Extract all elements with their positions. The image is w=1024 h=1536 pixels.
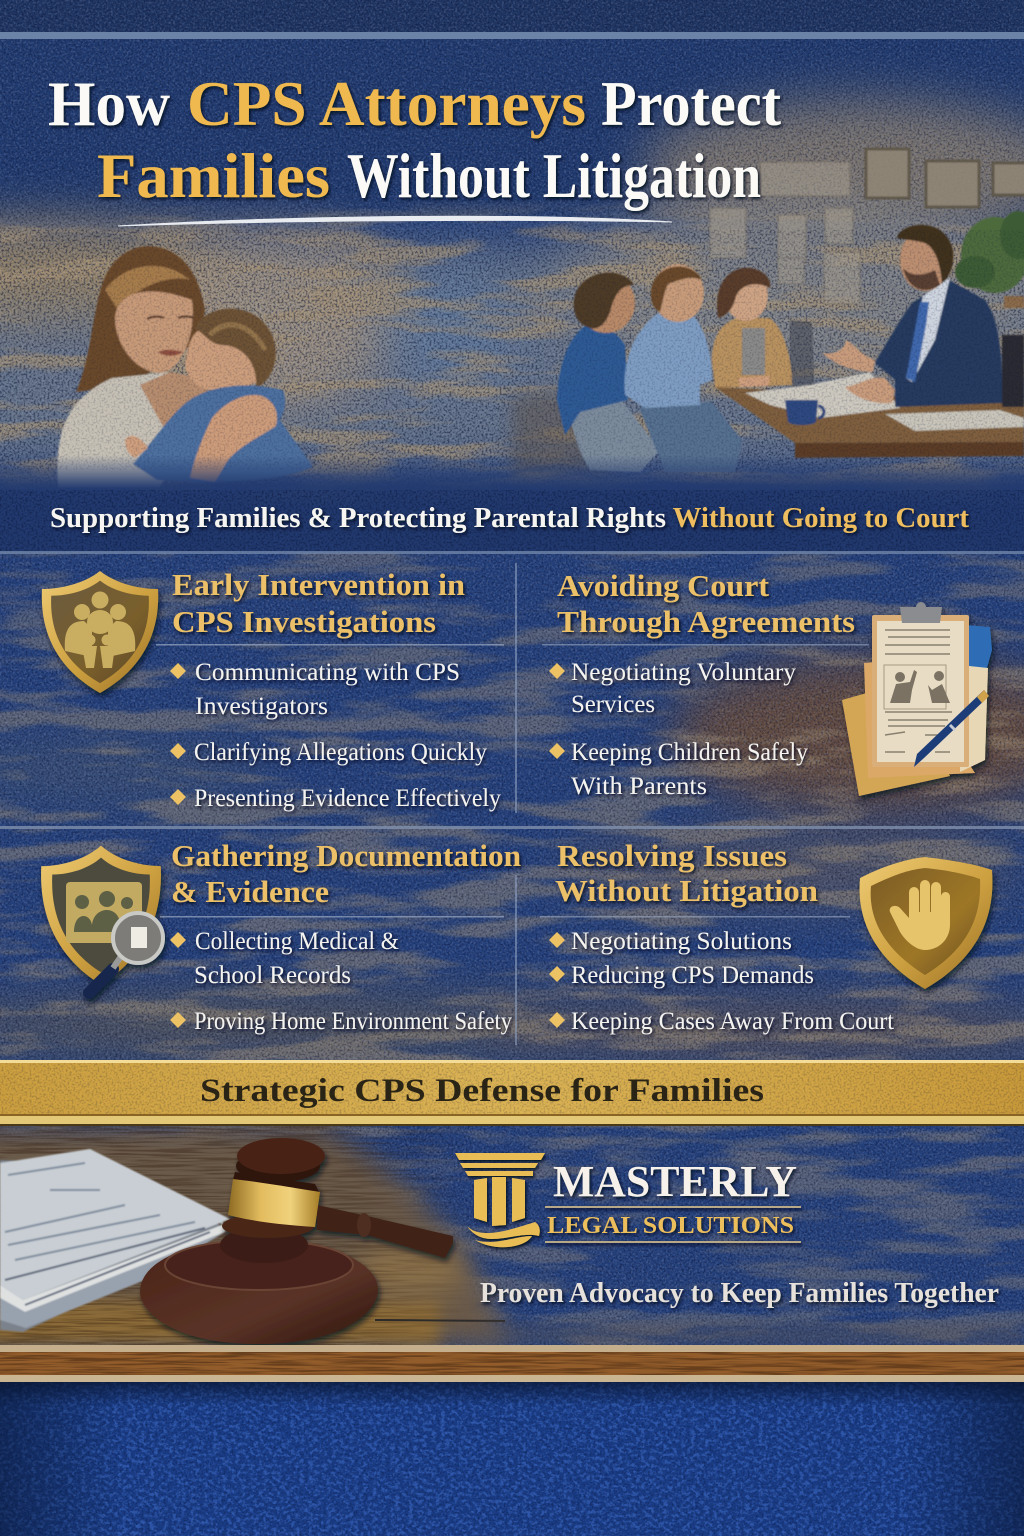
banner: strategic defense: Strategic CPS Defense for Families: [200, 1073, 764, 1109]
illustration: mother hugging child: [57, 246, 313, 487]
title: Families: [97, 141, 330, 211]
heading: Resolving Issues: [557, 838, 787, 873]
banner: strategic defense: [0, 1060, 1024, 1126]
heading: & Evidence: [171, 874, 329, 909]
wood strip: [0, 1345, 1024, 1382]
bottom band: [0, 1382, 1024, 1536]
heading: Early Intervention in: [172, 567, 465, 602]
bullet list: Investigators: [195, 693, 328, 720]
bullet list: [170, 659, 501, 812]
illustration: gavel: [140, 1138, 453, 1344]
heading: [555, 838, 818, 908]
heading: [171, 838, 521, 909]
panel: avoiding court: [542, 568, 992, 800]
bullet list: Clarifying Allegations Quickly: [194, 739, 487, 766]
heading: Avoiding Court: [557, 568, 770, 603]
office background: [710, 149, 1024, 304]
title: Protect: [601, 69, 781, 139]
title: CPS Attorneys: [187, 69, 586, 139]
panel: gathering documentation: [41, 838, 521, 1035]
bullet list: School Records: [194, 962, 351, 989]
bullet list: Negotiating Solutions: [571, 928, 792, 955]
illustration: children meeting attorney: [512, 211, 1024, 478]
icon: pillar: [455, 1153, 545, 1247]
bullet list: Services: [571, 691, 655, 718]
heading: [557, 568, 855, 639]
icon: clipboard and pen: [842, 602, 992, 796]
title underline: [118, 216, 672, 226]
bullet list: Negotiating Voluntary: [571, 659, 796, 686]
illustration: stack of papers: [0, 1149, 230, 1332]
icon: shield with magnifier: [41, 846, 163, 993]
tagline: Proven Advocacy to Keep Families Together: [480, 1278, 999, 1309]
logo: masterly legal solutions: LEGAL SOLUTIONS: [547, 1213, 794, 1239]
icon: hand shield: [859, 857, 992, 989]
heading: Through Agreements: [557, 604, 855, 639]
wood table: [0, 1126, 1024, 1345]
scene grain and fade: [0, 230, 1024, 552]
panel: resolving issues: [540, 838, 992, 1035]
icon: family shield: [42, 571, 158, 693]
bullet list: [170, 928, 512, 1035]
bullet list: Proving Home Environment Safety: [194, 1008, 512, 1035]
title: Without Litigation: [347, 141, 761, 211]
bullet list: Presenting Evidence Effectively: [194, 785, 501, 812]
bullet list: Keeping Children Safely: [571, 739, 808, 766]
heading: Without Litigation: [555, 873, 818, 908]
bullet list: Keeping Cases Away From Court: [571, 1008, 894, 1035]
logo: masterly legal solutions: [455, 1153, 801, 1247]
bullet list: Communicating with CPS: [195, 659, 460, 686]
logo: masterly legal solutions: MASTERLY: [553, 1157, 797, 1206]
heading: [172, 567, 465, 639]
bullet list: Reducing CPS Demands: [571, 962, 814, 989]
subtitle: Supporting Families & Protecting Parental Rights Without Going to Court: [50, 502, 969, 534]
heading: Gathering Documentation: [171, 838, 521, 873]
bullet list: [549, 659, 808, 800]
bullet list: With Parents: [571, 773, 707, 800]
bullet list: [549, 928, 894, 1035]
panel: early intervention: [42, 567, 504, 812]
heading: CPS Investigations: [172, 604, 436, 639]
title: How: [48, 69, 170, 139]
bullet list: Collecting Medical &: [195, 928, 399, 955]
title: [48, 69, 781, 211]
